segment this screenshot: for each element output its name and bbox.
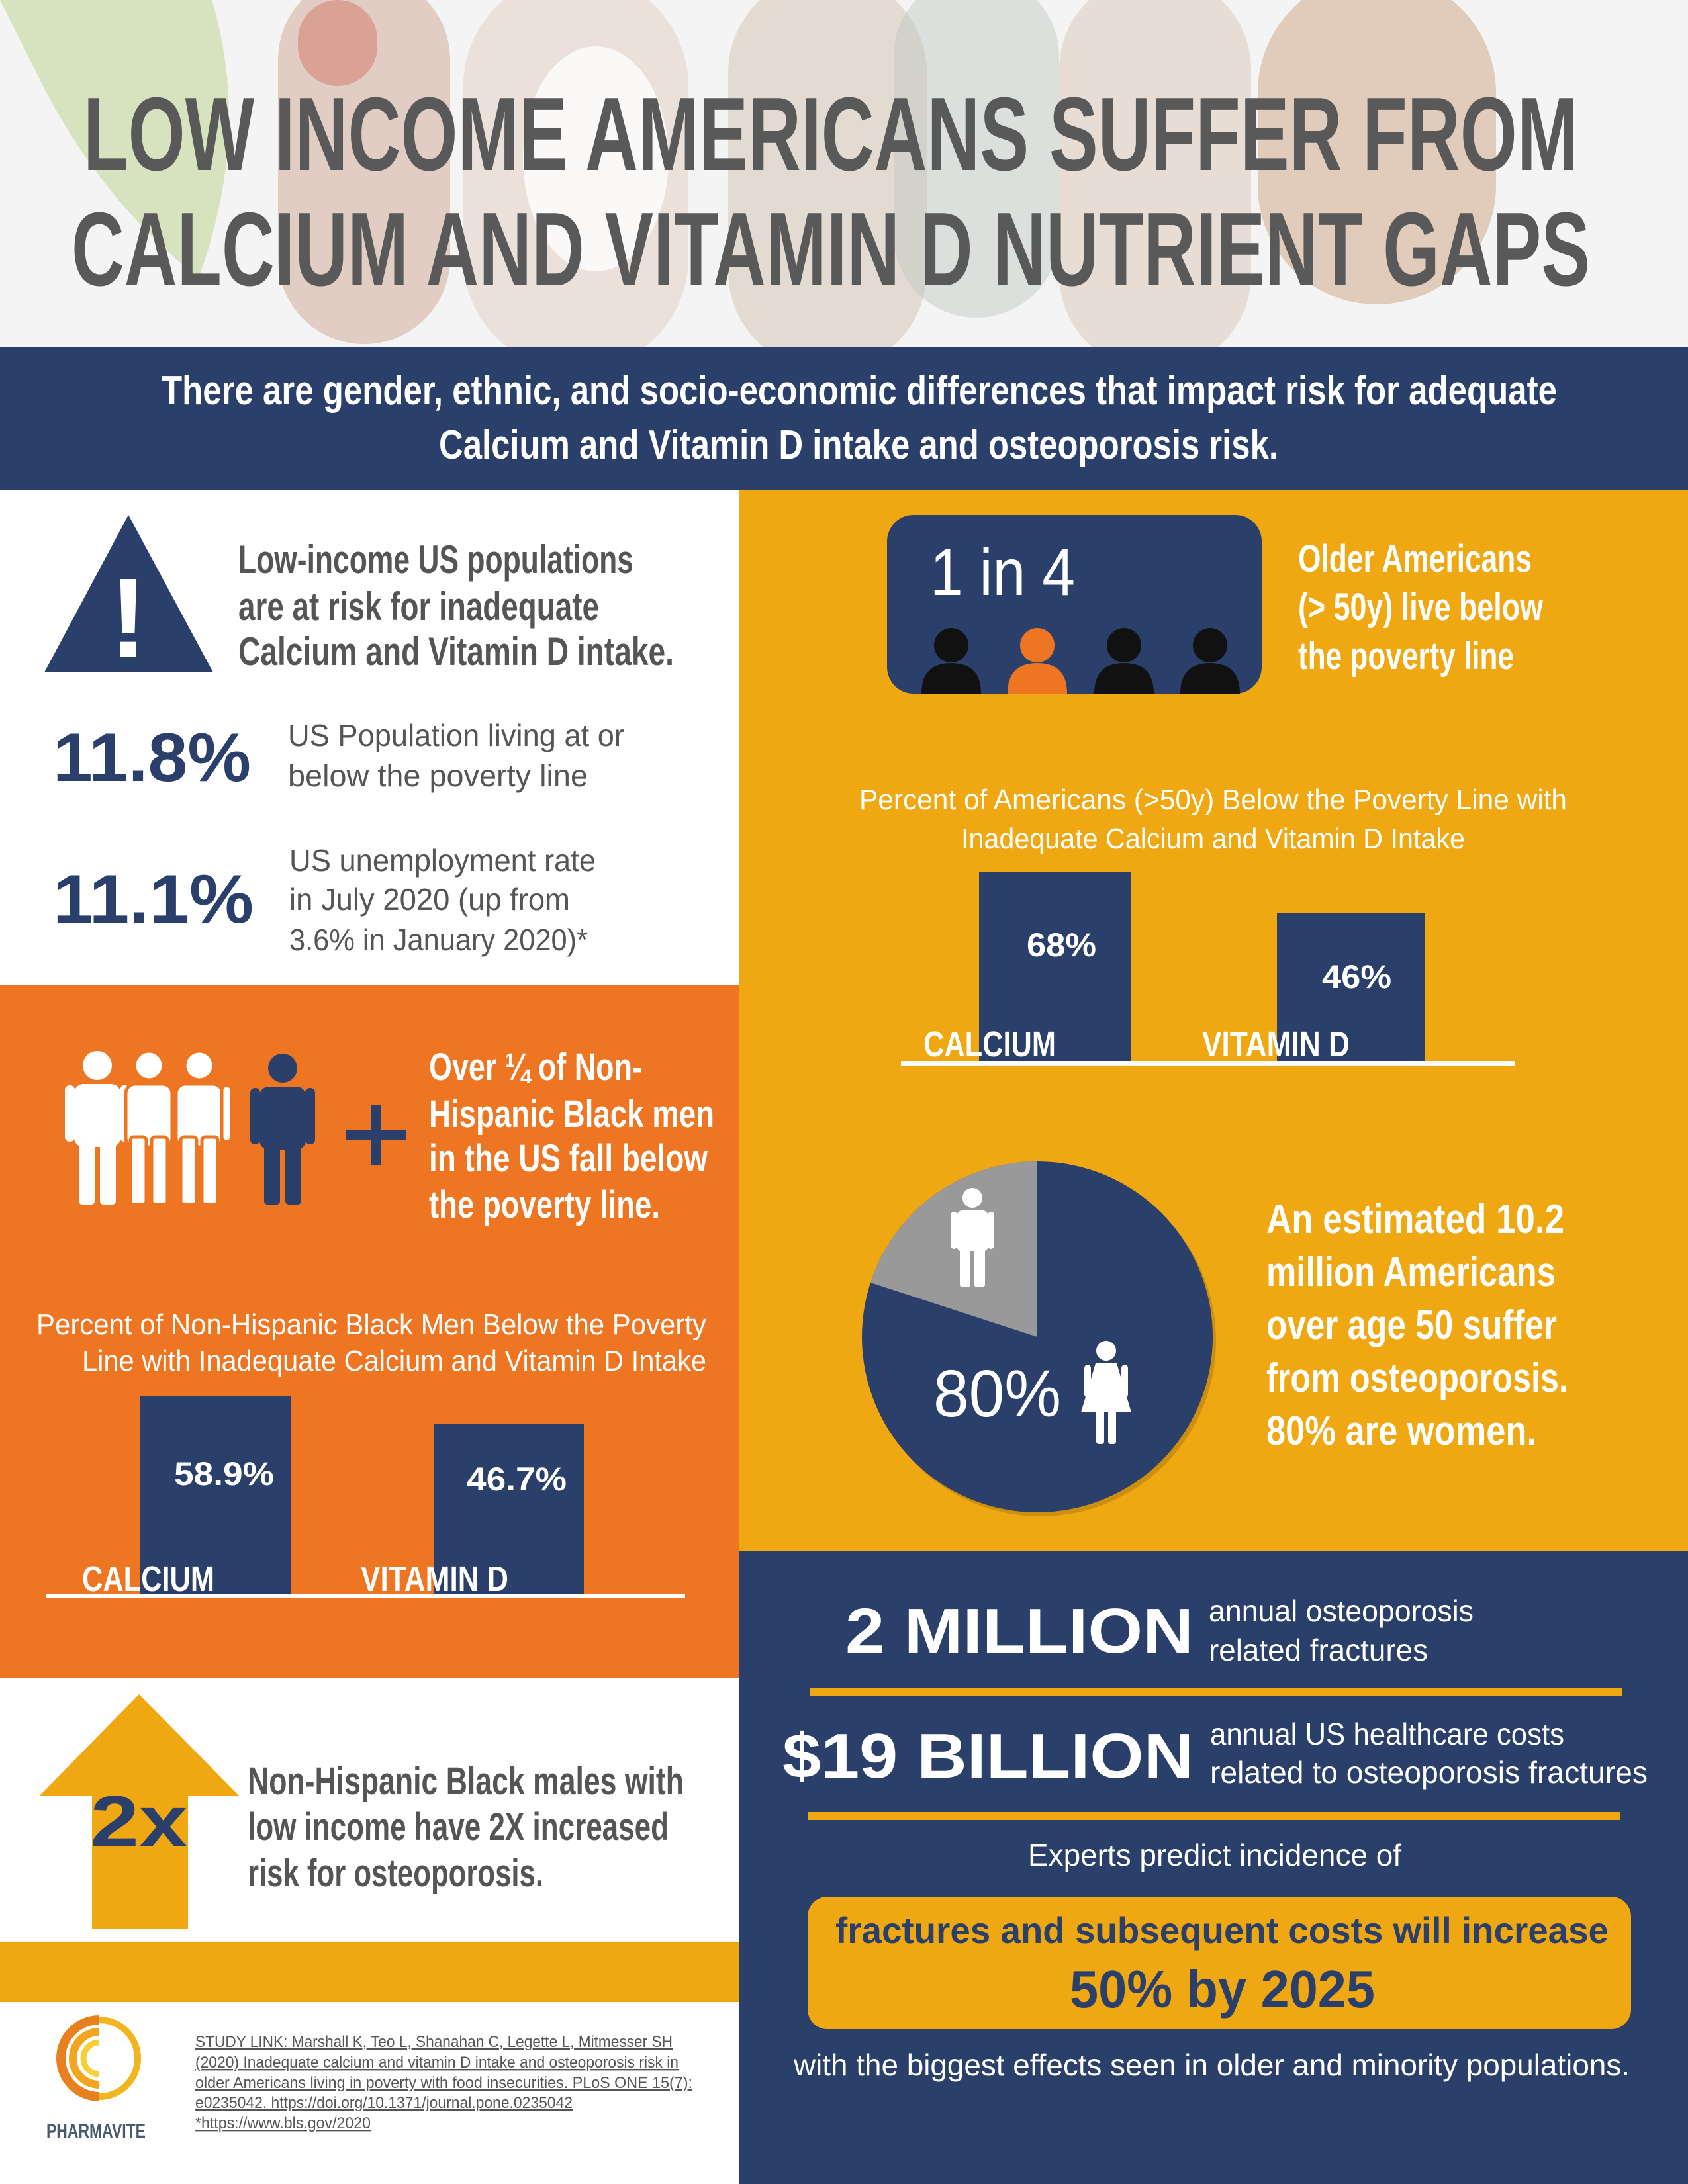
icon: man [951, 1188, 994, 1287]
bar chart: black men: 58.9% [174, 1455, 274, 1492]
pie chart: osteoporosis by sex: 80% [933, 1357, 1061, 1431]
text: at risk: are at risk for inadequate [238, 584, 599, 629]
stat: 11.8%: 11.8% [53, 719, 251, 796]
bar chart: older americans: 68% [1027, 927, 1096, 964]
subtitle band: Calcium and Vitamin D intake and osteoporosis risk. [439, 422, 1278, 468]
stat: 11.8%: below the poverty line [288, 758, 588, 793]
text: 2x risk [248, 1760, 684, 1895]
text: osteoporosis estimate [1266, 1197, 1568, 1454]
text: 2x risk: low income have 2X increased [248, 1805, 669, 1848]
text: older americans: (> 50y) live below [1298, 586, 1544, 629]
icon: pharmavite logo [46, 2012, 152, 2142]
subtitle band [0, 347, 1688, 490]
callout: 50% by 2025: 50% by 2025 [1070, 1960, 1375, 2019]
text: at risk: Calcium and Vitamin D intake. [238, 629, 674, 674]
text: 2x risk: risk for osteoporosis. [248, 1852, 543, 1895]
text: study link: (2020) Inadequate calcium and vitamin D intake and osteoporosis risk in [195, 2054, 679, 2071]
text: osteoporosis estimate: million Americans [1266, 1250, 1556, 1295]
gold bar [0, 1942, 739, 2002]
text: over 1/4: the poverty line. [429, 1183, 660, 1226]
bar chart: older americans: VITAMIN D [1202, 1024, 1350, 1064]
stat: 11.1% [53, 843, 596, 957]
bar chart: older americans: CALCIUM [923, 1024, 1056, 1064]
bar chart: black men: VITAMIN D [361, 1559, 508, 1599]
footer [46, 2012, 692, 2142]
panel: costs [739, 1551, 1688, 2184]
text: experts predict: Experts predict incidence of [1028, 1838, 1401, 1872]
stat: 11.8% [53, 718, 624, 796]
callout: 1 in 4 [887, 515, 1262, 694]
stat: 11.1%: US unemployment rate [289, 843, 596, 878]
icon: warning triangle [44, 515, 213, 681]
stat: 2 million [845, 1594, 1474, 1667]
text: 2x risk: Non-Hispanic Black males with [248, 1760, 684, 1803]
text: study link: *https://www.bls.gov/2020 [195, 2115, 371, 2132]
bar chart: older americans: 46% [1322, 958, 1391, 995]
text: at risk [238, 537, 674, 674]
stat: 19 billion: related to osteoporosis fractures [1210, 1755, 1648, 1790]
header photo background [0, 0, 1688, 371]
panel: non-hispanic black men [0, 985, 739, 1678]
stat: 2 million: 2 MILLION [845, 1596, 1194, 1666]
stat: 19 billion: $19 BILLION [782, 1721, 1194, 1792]
text: study link: STUDY LINK: Marshall K, Teo L, Shanahan C, Legette L, Mitmesser SH [195, 2033, 673, 2051]
panel: low income stats [0, 490, 739, 985]
bar chart: black men [36, 1308, 706, 1599]
icon: up arrow: 2x [90, 1781, 188, 1862]
text: over 1/4: Hispanic Black men [429, 1093, 714, 1136]
bar chart: black men: Percent of Non-Hispanic Black Men Below the Poverty [36, 1308, 706, 1341]
text: older americans: the poverty line [1298, 635, 1514, 678]
bar chart: older americans: Percent of Americans (>50y) Below the Poverty Line with [859, 784, 1567, 816]
text: biggest effects: with the biggest effects seen in older and minority populations. [793, 2048, 1630, 2082]
stat: 2 million: related fractures [1209, 1633, 1428, 1667]
stat: 19 billion [782, 1717, 1648, 1792]
text: study link: older Americans living in poverty with food insecurities. PLoS ONE 15(7): [195, 2074, 692, 2092]
text: over 1/4 [429, 1046, 714, 1226]
stat: 11.1%: 3.6% in January 2020)* [289, 923, 588, 957]
text: older americans: Older Americans [1298, 537, 1532, 580]
text: osteoporosis estimate: 80% are women. [1266, 1408, 1536, 1454]
stat: 11.8%: US Population living at or [288, 718, 624, 752]
panel: 2x risk [0, 1678, 739, 1942]
text: older americans [1298, 537, 1544, 678]
callout: 50% by 2025: fractures and subsequent costs will increase [835, 1909, 1609, 1951]
text: osteoporosis estimate: over age 50 suffer [1266, 1302, 1557, 1348]
icon: warning triangle: ! [110, 555, 147, 681]
text: over 1/4: in the US fall below [429, 1137, 708, 1180]
icon: up arrow [39, 1694, 240, 1929]
text: study link: e0235042. https://doi.org/10.1371/journal.pone.0235042 [195, 2094, 573, 2112]
stat: 11.1%: in July 2020 (up from [289, 882, 570, 917]
stat: 19 billion: annual US healthcare costs [1210, 1717, 1564, 1751]
bar chart: black men: CALCIUM [82, 1559, 214, 1599]
text: osteoporosis estimate: from osteoporosis. [1266, 1355, 1568, 1401]
text: at risk: Low-income US populations [238, 537, 633, 582]
icon: woman [1081, 1341, 1131, 1444]
pie chart: osteoporosis by sex [862, 1161, 1216, 1516]
stat: 2 million: annual osteoporosis [1209, 1594, 1474, 1628]
bar chart: black men: 46.7% [467, 1461, 567, 1498]
bar chart: black men: Line with Inadequate Calcium and Vitamin D Intake [82, 1345, 706, 1377]
title [71, 76, 1590, 308]
stat: 11.1%: 11.1% [53, 861, 254, 938]
text: osteoporosis estimate: An estimated 10.2 [1266, 1197, 1564, 1242]
bar chart: older americans: Inadequate Calcium and Vitamin D Intake [961, 823, 1465, 855]
icon: people group [65, 1051, 406, 1205]
bar chart: older americans [859, 784, 1567, 1066]
text: over 1/4: Over ¼ of Non- [429, 1046, 642, 1089]
text: study link [195, 2033, 692, 2132]
icon: pharmavite logo: PHARMAVITE [46, 2120, 146, 2142]
panel: older americans [739, 490, 1688, 1551]
callout: 1 in 4: 1 in 4 [930, 535, 1075, 610]
callout: 50% by 2025 [808, 1897, 1631, 2029]
